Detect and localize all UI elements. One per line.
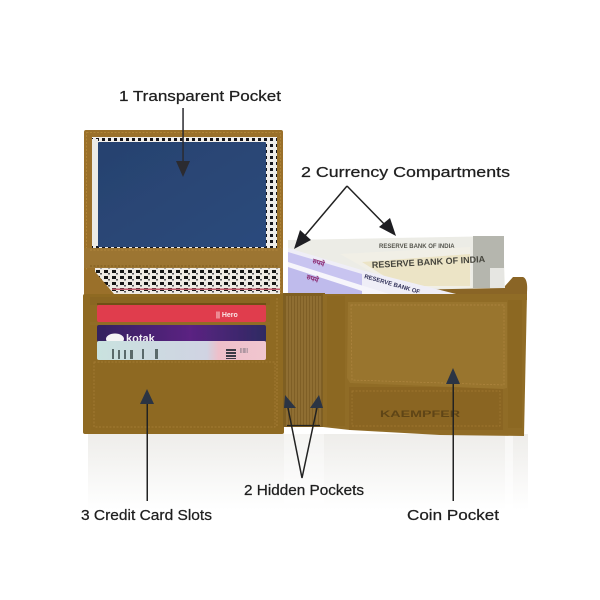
arrow: credit card slots xyxy=(140,389,154,501)
arrows: currency compartments xyxy=(294,186,396,249)
red card: || Hero xyxy=(216,312,238,319)
ID card xyxy=(97,341,266,360)
front notes: रुपये xyxy=(304,272,321,285)
coin pocket flap xyxy=(347,302,507,389)
front notes: RESERVE BANK OF xyxy=(363,274,421,296)
wallet reflection xyxy=(84,427,528,511)
purple bank card: kotak xyxy=(126,333,156,345)
front notes: रुपये xyxy=(310,256,327,269)
label: 2 Currency Compartments: 2 Currency Compartments xyxy=(301,164,510,181)
purple bank card xyxy=(97,325,266,345)
top flap xyxy=(84,130,283,296)
checked lining frame xyxy=(92,137,277,248)
card slots xyxy=(90,297,270,305)
currency notes xyxy=(288,236,505,296)
arrow: transparent pocket xyxy=(176,108,190,177)
ID card: |||||| xyxy=(240,348,248,354)
back note xyxy=(288,236,505,292)
arrows: hidden pockets xyxy=(284,395,323,478)
arrow: coin pocket xyxy=(446,368,460,501)
front notes xyxy=(288,248,460,296)
back note: RESERVE BANK OF INDIA xyxy=(372,254,486,270)
transparent pocket with blue card xyxy=(98,142,266,247)
label: Coin Pocket: Coin Pocket xyxy=(407,507,500,524)
flap band xyxy=(84,248,283,268)
lower coin pocket with brand xyxy=(349,387,503,430)
label: 1 Transparent Pocket: 1 Transparent Pocket xyxy=(119,88,282,105)
label: 2 Hidden Pockets: 2 Hidden Pockets xyxy=(244,483,364,499)
left card panel xyxy=(83,294,284,434)
wallet illustration xyxy=(83,130,527,436)
back note: RESERVE BANK OF INDIA xyxy=(379,244,455,250)
right panel xyxy=(323,294,527,436)
front pocket xyxy=(91,360,279,430)
back wallet edge xyxy=(428,277,527,300)
red card xyxy=(97,305,266,322)
lower coin pocket with brand: KAEMPFER xyxy=(380,409,460,420)
spine xyxy=(283,293,325,427)
lower checked lining xyxy=(95,268,280,294)
label: 3 Credit Card Slots: 3 Credit Card Slots xyxy=(81,508,212,524)
